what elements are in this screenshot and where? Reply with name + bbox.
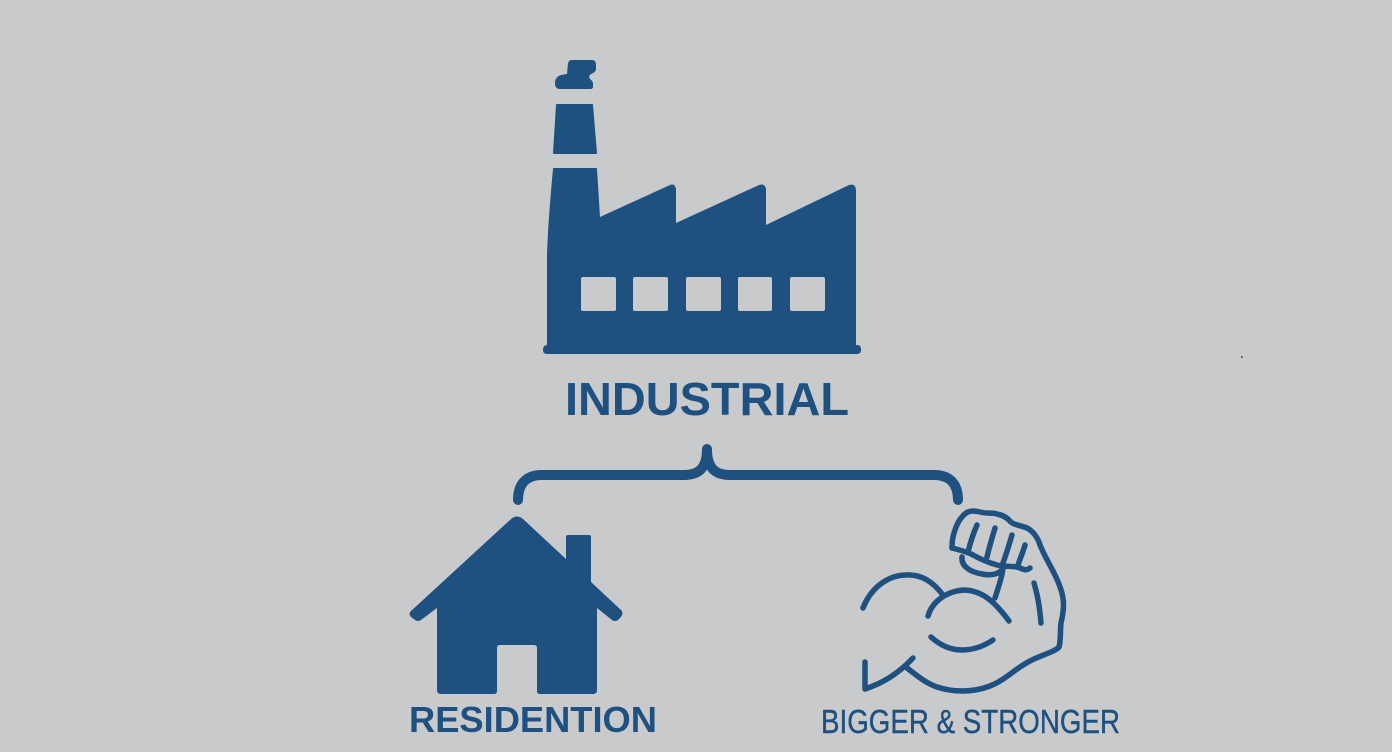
fingers [968,525,1025,565]
factory smoke [555,60,596,89]
icon: factory [543,60,861,354]
thumb and wrist [962,557,1003,598]
factory chimney top [553,104,597,154]
knuckle line [952,548,1030,570]
arm outline [907,545,1064,691]
label: residention: RESIDENTION [409,699,657,740]
brace connector [518,449,958,500]
label: bigger and stronger: BIGGER & STRONGER [821,703,1120,740]
armpit lower line [865,658,913,689]
icon: house [410,516,622,694]
heading: industrial: INDUSTRIAL [565,373,849,425]
biceps curve [928,590,1009,621]
fist outline [952,511,1040,548]
shoulder curve [863,575,943,608]
forearm line [1034,583,1041,623]
chest line [931,637,993,650]
factory building [543,168,861,354]
icon: flexed arm [863,511,1064,691]
